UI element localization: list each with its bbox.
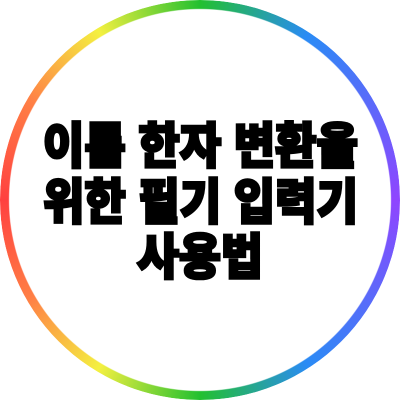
title line 1: 이름 한자 변환을 — [43, 120, 358, 174]
title line 3: 사용법 — [137, 231, 263, 285]
title line 2: 위한 필기 입력기 — [43, 176, 358, 230]
